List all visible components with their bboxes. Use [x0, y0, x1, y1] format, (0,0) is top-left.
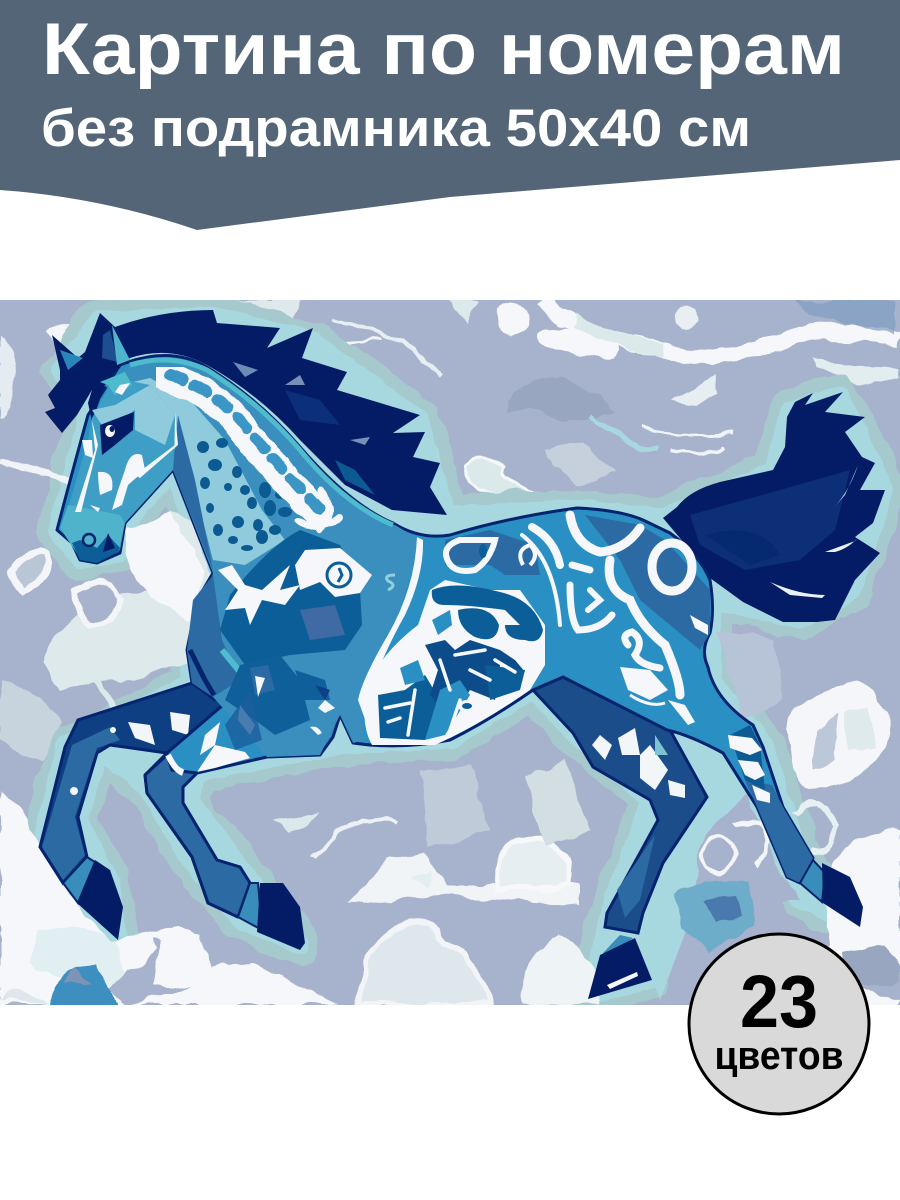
header banner: [0, 0, 900, 230]
shoulder shade: [187, 525, 420, 757]
near hind leg: [728, 725, 813, 883]
neck scroll ornaments: [165, 375, 340, 530]
nostril and muzzle: [72, 535, 120, 563]
speckled neck: [120, 378, 285, 565]
teal halo inner: [40, 315, 885, 995]
badge: 23 colours: цветов: [714, 1034, 844, 1078]
eye: [100, 412, 134, 455]
background ornaments upper: [0, 300, 900, 495]
mane highlights: [233, 362, 375, 495]
horse: [40, 310, 885, 999]
flank medallion: [364, 580, 545, 745]
mane: [45, 310, 447, 515]
small s mark: [387, 575, 395, 590]
chest rosette: [218, 530, 372, 665]
tail: [663, 392, 885, 622]
near foreleg lower: [145, 755, 250, 917]
chest spots: [197, 438, 292, 551]
ears: [60, 350, 83, 370]
badge: 23 colours: [689, 934, 869, 1114]
white stripe: [358, 537, 423, 725]
foreleg marks: [168, 755, 183, 773]
far foreleg: [40, 683, 237, 883]
teal halo outer: [40, 315, 885, 995]
subtitle: без подрамника 50х40 см: [41, 99, 751, 158]
far hind leg: [533, 677, 707, 933]
hooves: [63, 857, 863, 999]
neck: [105, 361, 385, 580]
space between hind legs: [649, 784, 733, 1000]
hip scroll ornaments: [522, 515, 710, 725]
title: Картина по номерам: [42, 9, 845, 90]
top medallion: [445, 530, 540, 575]
head ornaments: [75, 412, 178, 512]
painting: [0, 300, 900, 1010]
belly patches: [170, 655, 335, 775]
badge: 23 colours: 23: [740, 960, 818, 1043]
body: [57, 355, 813, 917]
background clouds: [0, 460, 900, 1010]
face: [60, 372, 178, 563]
